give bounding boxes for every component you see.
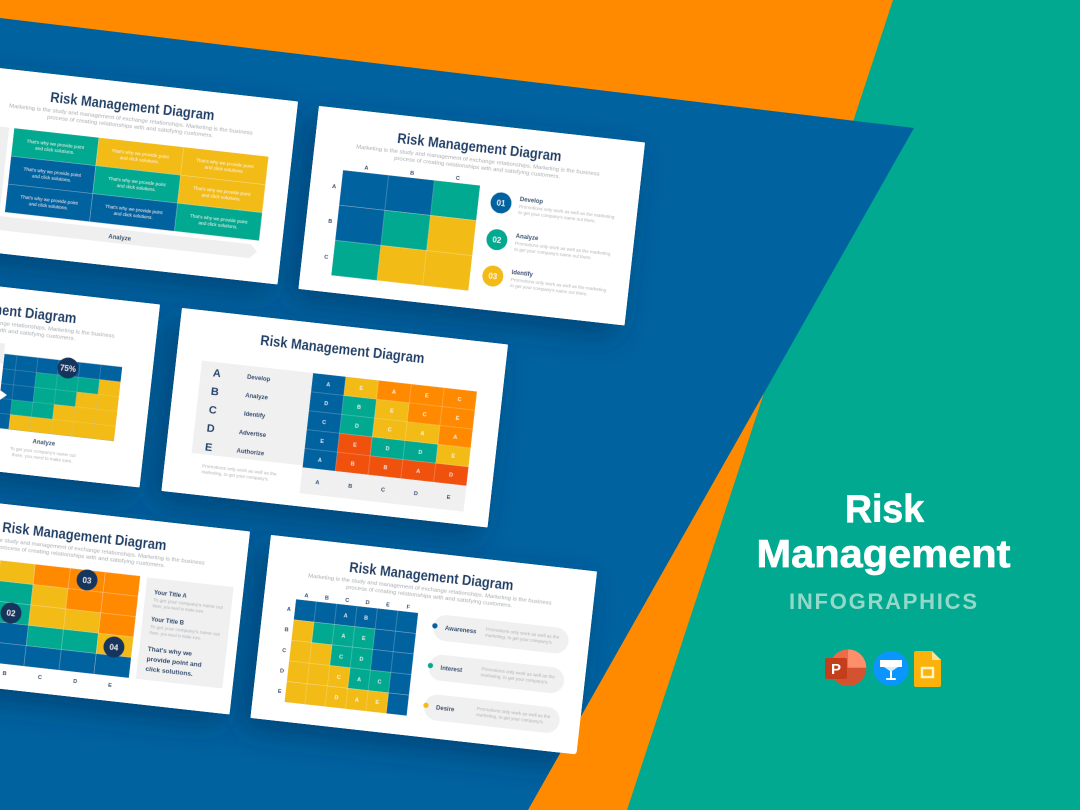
chart: 5x5 lettered matrix <box>302 373 477 486</box>
chart: 3x3 text matrix: That's why we provide point <box>111 148 170 160</box>
chart: 6x5 lettered grid: C <box>336 675 341 681</box>
list item: 03 Identify <box>481 264 608 299</box>
chart axis labels: A <box>304 593 309 600</box>
chart axis labels: A <box>286 607 291 613</box>
chart axis labels: C <box>345 598 349 604</box>
legend item: Awareness: Awareness <box>445 626 477 636</box>
marker: 02 <box>0 601 23 625</box>
list item: 01 Develop: to get your company's name out there. <box>518 210 596 224</box>
text block: slide 6 subtitle: Marketing is the study and management of exchange relationships. Marketing is the business <box>308 573 552 607</box>
arrow: horizontal axis with Analyze label <box>0 214 258 259</box>
chart: 3x3 risk matrix <box>331 170 480 291</box>
chart axis: bottom letters: D <box>73 679 77 685</box>
panel: slide 3, stepped heat grid with 75% marker <box>0 268 160 487</box>
panel: side note: click solutions. <box>145 666 193 678</box>
list item: 01 Develop <box>489 191 616 226</box>
text block: slide 6 subtitle: process of creating relationships with and satisfying customers. <box>346 585 513 609</box>
list item: 02 Analyze: to get your company's name out there. <box>514 247 592 260</box>
chart: 6x5 lettered grid: C <box>377 679 382 686</box>
chart: 5x5 lettered matrix: E <box>320 439 324 445</box>
legend item: Desire: Promotions only work as well as the <box>477 706 551 719</box>
subtitle: INFOGRAPHICS: INFOGRAPHICS <box>789 589 977 614</box>
text block: slide 4 note: marketing, to get your company's. <box>201 469 269 482</box>
chart: 5x5 lettered matrix: E <box>353 442 357 449</box>
chart: 6x5 lettered grid: C <box>339 654 343 661</box>
chart axis labels: C <box>455 176 460 182</box>
chart axis: bottom letters: A <box>315 480 320 486</box>
legend: letter key: Authorize <box>236 448 265 458</box>
panel: slide 6, 6x5 grid with pill legend <box>250 535 597 754</box>
chart: 6x5 lettered grid: A <box>343 613 348 620</box>
list item: 01 Develop: Promotions only work as well as the marketing <box>519 204 615 220</box>
chart: 3x3 text matrix: and click solutions. <box>198 220 238 230</box>
chart: 6x5 lettered grid: E <box>375 700 380 706</box>
chart: 5x5 lettered matrix: C <box>322 420 326 426</box>
text block: slide 2 subtitle: process of creating relationships with and satisfying customers. <box>394 156 561 180</box>
heading: slide 4 title: Risk Management Diagram <box>259 333 425 367</box>
heading: slide 6 title: Risk Management Diagram <box>348 560 514 594</box>
legend item: Awareness <box>431 614 570 655</box>
chart: 5x5 lettered matrix: D <box>355 424 359 430</box>
chart: 6x5 lettered grid: A <box>341 633 346 640</box>
legend item: Interest: marketing, to get your company's. <box>480 672 549 685</box>
chart: 5x5 lettered matrix: B <box>350 461 355 468</box>
chart: 6x5 lettered grid <box>284 599 418 716</box>
list item: 03 Identify: Promotions only work as well as the marketing <box>511 277 607 293</box>
legend item: Interest <box>426 653 565 694</box>
chart: 3x3 text matrix: and click solutions. <box>29 201 68 211</box>
text block: Analyze caption: there, you need to make sure. <box>12 452 73 464</box>
chart: 6x5 lettered grid: A <box>355 697 359 704</box>
legend: letter key <box>192 361 313 465</box>
legend item: Interest: Promotions only work as well as the <box>481 666 556 680</box>
chart axis: bottom letters: C <box>381 487 385 494</box>
chart: 6x5 lettered grid: D <box>359 657 364 663</box>
chart axis labels: A <box>364 165 369 172</box>
chart: 5x5 lettered matrix: A <box>453 435 458 441</box>
chart axis: bottom letters: B <box>2 671 7 677</box>
text block: Analyze caption <box>9 437 78 464</box>
panel: side note: That's why we <box>147 646 193 658</box>
panel: slide 1, matrix with text cells <box>0 65 298 284</box>
panel: slide 2, 3x3 matrix with numbered list <box>298 106 645 325</box>
text block: slide 3 subtitle <box>0 306 115 347</box>
text block: slide 1 subtitle: process of creating relationships with and satisfying customers. <box>47 115 214 139</box>
heading: slide 1 title: Risk Management Diagram <box>49 90 215 124</box>
chart: 3x3 text matrix: and click solutions. <box>204 165 244 174</box>
title: Risk Management: Risk <box>845 488 924 531</box>
panel: side note: To get your company's name out <box>150 624 221 637</box>
legend: letter key: B <box>210 386 219 399</box>
list item: 01 Develop: Develop <box>519 197 544 206</box>
marker: 04: 04 <box>109 643 119 653</box>
marker: 02: 02 <box>6 609 16 619</box>
chart axis: bottom letters: D <box>413 491 418 497</box>
marker: 03: 03 <box>82 576 92 586</box>
heading: slide 5 title: Risk Management Diagram <box>1 520 167 554</box>
list item: 03 Identify: Identify <box>511 270 534 279</box>
chart: 6x5 lettered grid: B <box>364 615 368 622</box>
chart: 5x5 lettered matrix: D <box>385 446 390 453</box>
chart: 3x3 text matrix: and click solutions. <box>120 155 159 164</box>
panel: side note: To get your company's name out <box>153 597 224 610</box>
chart axis labels: D <box>280 668 284 675</box>
chart: 5x5 lettered matrix: E <box>425 393 429 400</box>
chart: 5x5 lettered matrix: E <box>359 386 364 392</box>
chart: 5x5 lettered matrix: D <box>324 401 329 407</box>
text block: slide 2 subtitle: Marketing is the study and management of exchange relationships. Marketing is the business <box>356 144 600 178</box>
legend: letter key: Develop <box>247 375 271 383</box>
chart axis labels <box>277 591 411 708</box>
chart: 6x5 lettered grid: A <box>357 677 361 683</box>
chart: 5x5 lettered matrix: A <box>392 389 396 396</box>
chart axis labels: E <box>386 602 390 609</box>
panel: side note: provide point and <box>146 656 202 669</box>
chart: 3x3 text matrix: That's why we provide point <box>105 204 164 215</box>
panel: slide 4, 5x5 lettered matrix <box>161 308 508 527</box>
callout: 75% marker <box>56 356 80 380</box>
list item: 03 Identify: to get your company's name out there. <box>510 283 588 297</box>
chart: 3x3 text matrix: and click solutions. <box>35 146 75 155</box>
chart: 5x5 lettered matrix: A <box>420 431 425 437</box>
chart axis labels: A <box>332 184 336 190</box>
arrow: horizontal axis with Analyze label: Analyze <box>108 234 132 243</box>
legend item: Awareness: Promotions only work as well as the <box>486 627 560 640</box>
chart: stepped grid <box>0 350 122 441</box>
panel: side note <box>136 577 234 688</box>
chart: 3x3 text matrix: That's why we provide point <box>26 139 85 150</box>
title: Risk Management: Management <box>756 533 1011 576</box>
panel: side note: there, you need to make sure. <box>152 603 205 614</box>
heading: slide 2 title: Risk Management Diagram <box>396 131 562 165</box>
chart: 3x3 text matrix: That's why we provide point <box>20 194 79 206</box>
chart: 3x3 text matrix: That's why we provide point <box>190 213 248 225</box>
chart axis: bottom letters: C <box>37 675 42 681</box>
chart axis labels: B <box>410 171 414 177</box>
arrow: vertical axis <box>0 125 9 209</box>
text block: slide 1 subtitle: Marketing is the study and management of exchange relationships. Marketing is the business <box>9 103 253 137</box>
chart axis labels: C <box>324 255 328 261</box>
legend: letter key: Advertise <box>238 430 267 439</box>
chart axis labels <box>324 162 460 275</box>
chart axis: bottom letters: B <box>348 484 352 490</box>
panel: slide 5, matrix with numbered markers and side note <box>0 495 250 714</box>
marker: 04 <box>102 635 126 659</box>
icon: Keynote <box>874 651 908 686</box>
chart: 5x5 lettered matrix: D <box>418 450 423 456</box>
legend: letter key: A <box>212 367 222 380</box>
chart axis: bottom letters: E <box>446 495 451 501</box>
chart: 5x5 risk matrix <box>0 556 140 678</box>
legend item: Interest: Interest <box>440 666 462 674</box>
chart: 5x5 lettered matrix: E <box>390 408 394 415</box>
legend item: Awareness: marketing, to get your company's. <box>485 633 553 645</box>
chart: 3x3 text matrix: That's why we provide point <box>196 158 255 169</box>
panel: side note: Your Title A <box>154 590 188 600</box>
chart: 5x5 lettered matrix: A <box>416 469 421 475</box>
chart axis: bottom letters: E <box>108 683 112 689</box>
chart: 5x5 lettered matrix: E <box>451 453 456 460</box>
list item: 01 Develop: 01 <box>496 198 506 208</box>
chart: 5x5 lettered matrix: B <box>357 405 361 411</box>
legend: letter key: Analyze <box>245 393 269 402</box>
list item: 03 Identify: 03 <box>488 272 498 282</box>
chart axis: bottom letters <box>0 667 112 689</box>
chart: 5x5 lettered matrix: C <box>387 427 392 434</box>
chart: 6x5 lettered grid: E <box>362 636 366 642</box>
chart: 3x3 text matrix <box>5 128 269 241</box>
icon: PowerPoint: P <box>831 661 841 678</box>
legend: letter key: C <box>208 404 217 417</box>
chart: 3x3 text matrix: and click solutions. <box>117 183 156 192</box>
legend item: Desire: Desire <box>436 705 455 714</box>
title: Risk Management <box>756 488 1011 576</box>
chart axis labels: B <box>328 219 332 225</box>
text block: slide 4 note <box>201 463 277 483</box>
chart: 3x3 text matrix: and click solutions. <box>201 192 241 202</box>
chart axis labels: B <box>284 627 289 634</box>
chart: 5x5 lettered matrix: B <box>383 465 388 471</box>
list item: 02 Analyze <box>485 228 612 263</box>
chart: 5x5 lettered matrix: A <box>326 382 331 388</box>
chart: 3x3 text matrix: and click solutions. <box>32 173 71 183</box>
chart axis labels: B <box>324 595 329 602</box>
chart axis: bottom letters <box>300 467 466 512</box>
icon: Google Slides <box>914 651 941 687</box>
text block: Analyze caption: To get your company's name out <box>10 446 77 458</box>
legend: letter key: E <box>204 441 213 454</box>
legend item: Desire: marketing, to get your company's. <box>476 712 544 725</box>
chart: 3x3 text matrix: That's why we provide point <box>23 166 82 178</box>
chart: 5x5 lettered matrix: C <box>422 412 427 418</box>
list item: 02 Analyze: Analyze <box>515 234 539 242</box>
chart: 5x5 lettered matrix: C <box>457 397 462 403</box>
chart axis labels: D <box>365 600 370 606</box>
marker: 03 <box>75 568 99 592</box>
chart axis labels: C <box>282 648 286 654</box>
text block: slide 5 subtitle: process of creating relationships with and satisfying customers. <box>0 545 166 569</box>
icon: PowerPoint <box>825 649 866 686</box>
legend: letter key: D <box>206 423 215 436</box>
chart: 5x5 lettered matrix: D <box>449 472 453 479</box>
chart: 3x3 text matrix: That's why we provide point <box>193 185 251 197</box>
chart: 3x3 text matrix: That's why we provide point <box>108 176 167 187</box>
panel: side note: there, you need to make sure. <box>149 630 202 641</box>
legend item: Desire <box>422 693 561 734</box>
chart: 3x3 text matrix: and click solutions. <box>113 211 153 220</box>
chart axis labels: F <box>406 605 411 611</box>
list item: 02 Analyze: 02 <box>492 235 502 245</box>
chart: 5x5 lettered matrix: A <box>318 458 322 464</box>
text block: slide 4 note: Promotions only work as well as the <box>202 463 277 477</box>
arrow: vertical axis <box>0 340 13 401</box>
list item: 02 Analyze: Promotions only work as well as the marketing <box>515 241 611 256</box>
legend: letter key: Identify <box>243 412 266 420</box>
chart: 6x5 lettered grid: D <box>334 695 339 702</box>
chart: 5x5 lettered matrix: E <box>455 416 460 422</box>
chart axis labels: E <box>277 689 282 695</box>
callout: 75% marker: 75% <box>59 363 76 374</box>
panel: side note: Your Title B <box>151 617 185 627</box>
text block: Analyze caption: Analyze <box>32 439 56 448</box>
